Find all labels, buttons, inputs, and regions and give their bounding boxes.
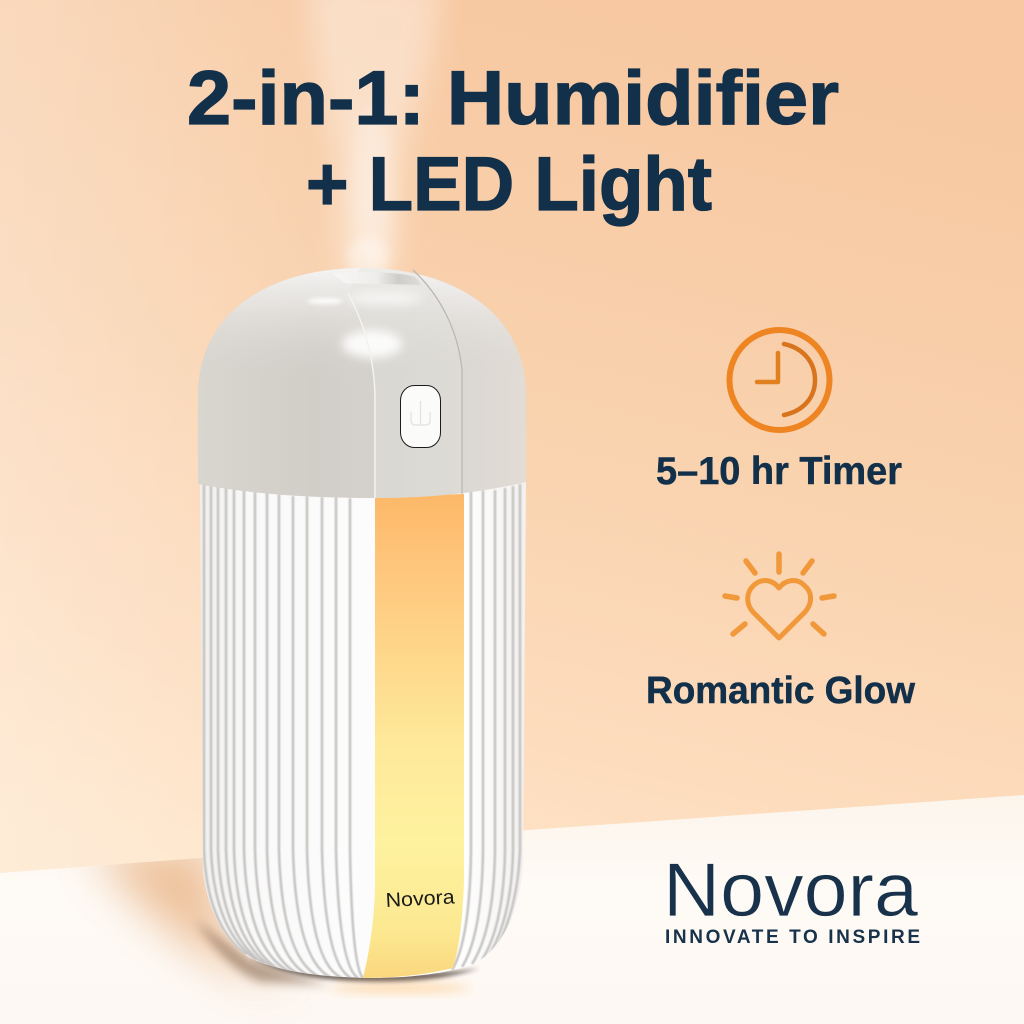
seam lines	[348, 270, 462, 498]
device brand label: Novora	[385, 886, 456, 912]
brand logo: INNOVATE TO INSPIRE	[665, 927, 920, 948]
light strip	[363, 494, 464, 978]
cap	[190, 262, 535, 500]
timer label: 5–10 hr Timer	[656, 450, 902, 493]
ribbed body	[200, 482, 526, 978]
title	[187, 56, 839, 227]
floor shadow	[90, 845, 480, 993]
title: + LED Light	[306, 142, 712, 227]
humidifier product	[90, 262, 535, 993]
power button	[400, 386, 440, 448]
brand logo: Novora	[663, 848, 919, 933]
glow label: Romantic Glow	[646, 670, 915, 712]
feature: glow	[646, 554, 915, 712]
title: 2-in-1: Humidifier	[187, 56, 839, 141]
icon: heart with rays	[725, 554, 834, 638]
mist plume	[310, 0, 440, 278]
feature: timer	[656, 330, 902, 493]
mist outlet slot	[333, 272, 420, 285]
icon: clock	[730, 330, 830, 430]
